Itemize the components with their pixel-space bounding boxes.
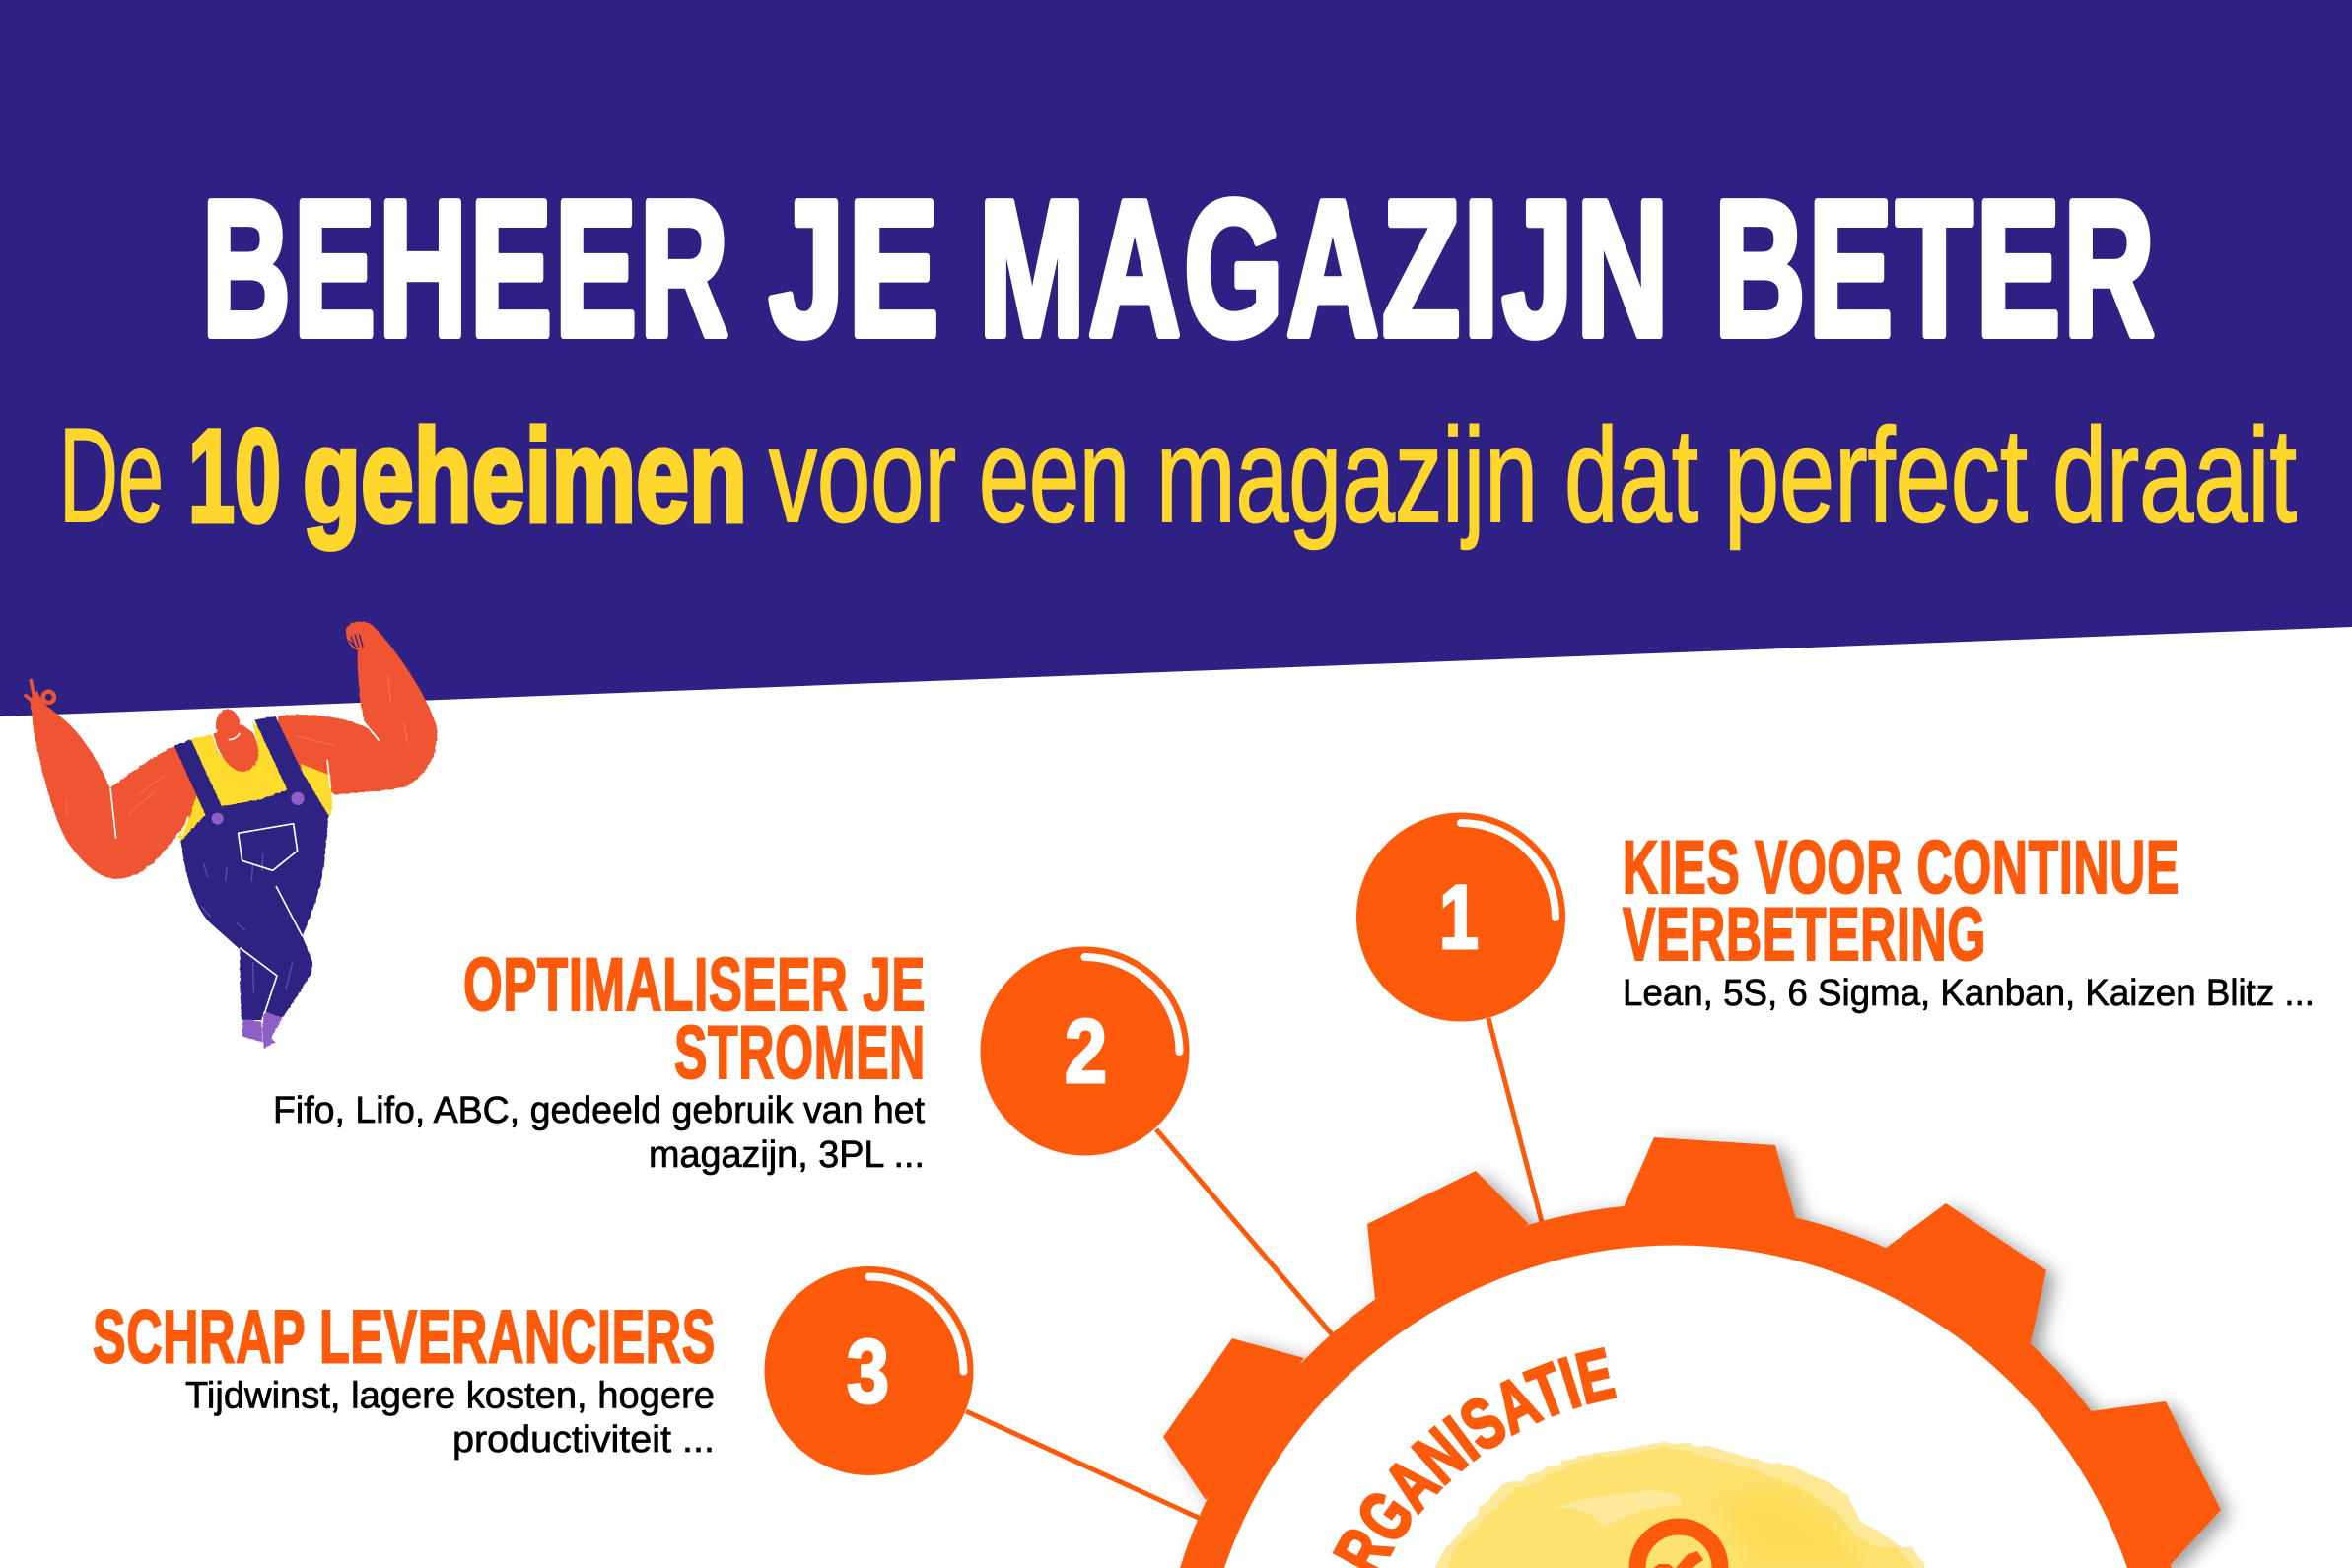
subtitle: magazijn <box>1156 400 1538 550</box>
gear ring and teeth <box>1163 1137 2221 1568</box>
subtitle <box>59 400 2297 550</box>
watercolour blob <box>1435 1442 1925 1568</box>
heading 1: VERBETERING <box>1623 893 1986 977</box>
text 2: magazijn, 3PL ... <box>649 1134 925 1176</box>
subtitle: perfect <box>1724 400 2028 550</box>
text 3 <box>185 1376 715 1461</box>
subtitle: 10 <box>188 403 281 550</box>
text 3: Tijdwinst, lagere kosten, hogere <box>185 1376 715 1417</box>
heading 2: OPTIMALISEER JE <box>463 943 926 1027</box>
badge 3 <box>765 1266 974 1475</box>
subtitle: De <box>59 400 164 550</box>
icon: check target <box>1637 1527 1720 1568</box>
subtitle: dat <box>1564 400 1698 550</box>
illustration: warehouse worker flexing <box>26 621 437 1049</box>
badge 2 <box>980 946 1189 1155</box>
text 3: productiviteit ... <box>452 1419 715 1461</box>
subtitle: geheimen <box>303 403 747 550</box>
gear inner disc <box>1224 1245 2127 1568</box>
header band <box>0 0 2352 716</box>
text 2: Fifo, Lifo, ABC, gedeeld gebruik van het <box>273 1090 925 1131</box>
badge 1: 1 <box>1439 867 1479 968</box>
heading 2: STROMEN <box>674 1011 926 1095</box>
subtitle: voor <box>769 400 956 550</box>
step 2 <box>273 943 1189 1176</box>
connector lines <box>966 1018 1542 1519</box>
subtitle: een <box>979 400 1130 550</box>
heading 2 <box>463 943 926 1095</box>
text 2 <box>273 1090 925 1176</box>
step 3 <box>93 1266 974 1475</box>
step 1 <box>1356 812 2315 1021</box>
title <box>202 161 2158 376</box>
title: BEHEER <box>202 161 731 376</box>
badge 2: 2 <box>1065 1001 1107 1102</box>
heading 3: SCHRAP LEVERANCIERS <box>93 1295 716 1380</box>
title: MAGAZIJN <box>979 161 1672 376</box>
badge 1 <box>1356 812 1565 1021</box>
title: JE <box>769 161 942 376</box>
gear <box>1163 1137 2221 1568</box>
badge 3: 3 <box>847 1322 889 1422</box>
heading 1 <box>1623 826 2179 977</box>
text 1: Lean, 5S, 6 Sigma, Kanban, Kaizen Blitz ... <box>1623 973 2315 1014</box>
